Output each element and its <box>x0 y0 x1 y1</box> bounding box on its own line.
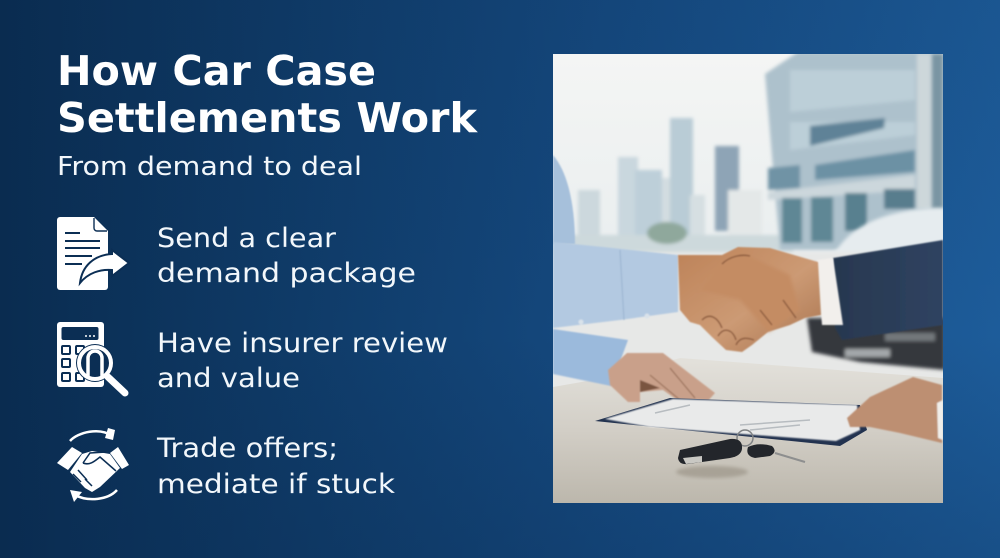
room behind hands <box>653 250 836 256</box>
step 2 text: Have insurer review <box>157 328 448 359</box>
step 2 text <box>157 328 448 394</box>
title: How Car Case <box>57 47 376 95</box>
icon: calculator with magnifier <box>57 322 125 393</box>
table <box>553 358 943 503</box>
step 1 text: Send a clear <box>157 223 337 254</box>
left person: body and lower arm <box>553 155 628 386</box>
title <box>57 47 479 142</box>
photo: handshake over settlement document <box>553 52 945 503</box>
step 2: insurer review <box>57 322 448 394</box>
step 3 text <box>156 433 395 500</box>
office building <box>765 52 945 250</box>
icon: handshake with cycle arrows <box>57 428 129 502</box>
right hand on document <box>847 377 943 443</box>
sky <box>553 54 943 387</box>
subtitle: From demand to deal <box>57 152 362 182</box>
left hand on document <box>608 353 715 402</box>
right person: suit sleeve <box>833 240 943 340</box>
left person: upper sleeve <box>553 242 678 328</box>
step 3 text: mediate if stuck <box>157 469 395 500</box>
parked white car roof <box>836 206 943 251</box>
settlement document <box>595 398 867 446</box>
step 3: trade offers <box>57 428 395 502</box>
car keys <box>676 430 805 478</box>
clasped hands <box>678 247 821 352</box>
step 1 text <box>157 223 416 289</box>
step 1 text: demand package <box>157 258 416 289</box>
dark car <box>807 318 945 370</box>
right person: shirt cuff <box>817 258 843 325</box>
title: Settlements Work <box>57 94 479 142</box>
icon: document with arrow <box>57 217 129 290</box>
step 1: demand package <box>57 217 416 290</box>
step 2 text: and value <box>157 363 300 394</box>
step 3 text: Trade offers; <box>156 433 338 464</box>
distant skyline <box>553 118 793 255</box>
